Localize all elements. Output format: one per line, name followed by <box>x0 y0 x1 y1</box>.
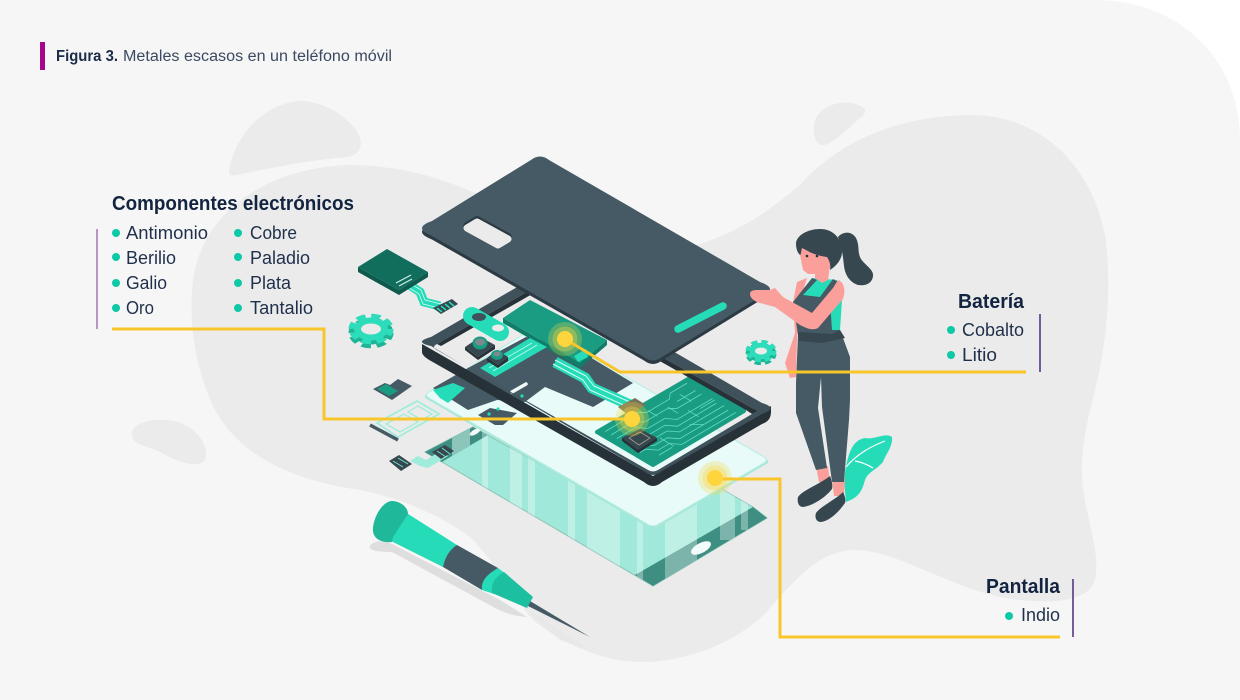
label: componentes electrónicos: Galio <box>126 273 167 293</box>
label: componentes electrónicos: Antimonio <box>126 223 208 243</box>
shoes <box>798 476 845 522</box>
label: componentes electrónicos: Oro <box>126 298 154 318</box>
camera ribbon <box>480 338 547 377</box>
dark inner board <box>433 337 633 425</box>
camera lenses <box>465 336 508 368</box>
title: Metales escasos en un teléfono móvil <box>123 48 392 65</box>
background blobs <box>132 101 1108 662</box>
back arm <box>785 278 807 378</box>
overalls <box>793 278 850 482</box>
label: pantalla: Indio <box>1021 605 1060 625</box>
chips <box>618 398 657 453</box>
micro SD card <box>373 379 412 400</box>
gear large <box>352 316 390 346</box>
flash module <box>472 313 504 332</box>
woman <box>750 229 892 522</box>
front arm <box>750 280 844 329</box>
label: batería: Cobalto <box>962 320 1024 340</box>
label: componentes electrónicos: Plata <box>250 273 292 293</box>
label: batería <box>947 291 1040 372</box>
label: pantalla <box>986 576 1073 637</box>
label: componentes electrónicos <box>97 193 354 329</box>
connector: batería <box>548 322 1026 372</box>
memory module <box>358 249 458 314</box>
connector: pantalla <box>698 461 1060 637</box>
small ribbon on board <box>433 383 465 403</box>
label: componentes electrónicos: Berilio <box>126 248 176 268</box>
hair <box>796 229 873 285</box>
title: Figura 3. <box>56 48 118 65</box>
label: componentes electrónicos: Tantalio <box>250 298 313 318</box>
battery flex cable <box>553 360 632 407</box>
label: pantalla: Pantalla <box>986 576 1061 598</box>
screwdriver <box>370 501 590 650</box>
gear small <box>748 341 774 364</box>
connector: componentes electrónicos <box>112 329 649 436</box>
belt <box>798 330 845 343</box>
label: componentes electrónicos: Paladio <box>250 248 310 268</box>
label: componentes electrónicos: Componentes electrónicos <box>112 193 354 215</box>
shirt <box>803 278 842 334</box>
title <box>40 42 392 70</box>
ankles <box>816 466 845 496</box>
label: batería: Litio <box>962 345 997 365</box>
lower screen prism <box>425 420 767 590</box>
label: batería: Batería <box>958 291 1025 313</box>
phone frame <box>422 276 771 486</box>
circuit board <box>597 379 744 465</box>
neck and face <box>800 248 838 283</box>
battery <box>503 300 607 368</box>
back cover <box>422 156 770 364</box>
screen flex cable <box>389 445 454 471</box>
board slot and dots <box>487 384 526 416</box>
glass display layer <box>425 327 768 530</box>
SIM tray <box>370 401 439 440</box>
leaf <box>845 435 892 502</box>
label: componentes electrónicos: Cobre <box>250 223 297 243</box>
